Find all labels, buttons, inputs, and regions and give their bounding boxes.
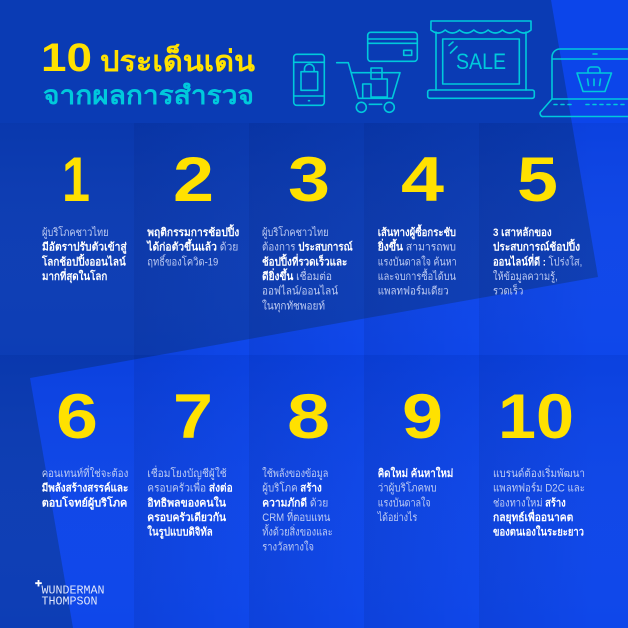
panel 4: แรงบันดาลใจ ค้นหา (378, 255, 457, 268)
panel 1: โลกช้อปปิ้งออนไลน์ (41, 253, 126, 268)
panel 7: 7 (173, 382, 213, 452)
panel 10: 10 (498, 382, 574, 452)
panel 6: มีพลังสร้างสรรค์และ (42, 482, 128, 495)
logo: Wunderman Thompson: THOMPSON (42, 595, 98, 608)
panel 10 (493, 382, 585, 539)
panel 1: มากที่สุดในโลก (42, 268, 108, 284)
panel 4: เส้นทางผู้ซื้อกระชับ (378, 224, 456, 240)
panel 10: ช่องทางใหม่ สร้าง (493, 496, 566, 509)
title: จากผลการสำรวจ (43, 80, 254, 110)
icon: storefront with SALE sign: SALE (456, 49, 506, 74)
panel 9: แรงบันดาลใจ (378, 496, 431, 509)
panel 3: ช้อปปิ้งที่รวดเร็วและ (262, 253, 347, 268)
panel 8 (262, 382, 333, 553)
panel 3: ดียิ่งขึ้น เชื่อมต่อ (262, 268, 332, 283)
logo: Wunderman Thompson: WUNDERMAN (42, 584, 104, 598)
panel 5: รวดเร็ว (493, 284, 523, 298)
panel 7: อิทธิพลของคนใน (147, 495, 226, 509)
panel 5: ออนไลน์ที่ดี : โปร่งใส, (493, 253, 582, 268)
panel 7: ในรูปแบบดิจิทัล (147, 525, 213, 540)
panel 8: ผู้บริโภค สร้าง (262, 481, 322, 495)
panel 10: กลยุทธ์เพื่ออนาคต (493, 509, 573, 525)
panel 2 (145, 145, 239, 268)
logo: Wunderman Thompson (35, 580, 105, 608)
panel 8: รางวัลทางใจ (262, 540, 314, 553)
panel 9: คิดใหม่ ค้นหาใหม่ (378, 466, 453, 480)
icon: shopping cart (337, 63, 400, 112)
panel 8: 8 (287, 382, 330, 452)
panel 7 (147, 382, 233, 540)
panel 4: ยิ่งขึ้น สามารถพบ (377, 239, 456, 254)
panel 4: แพลทฟอร์มเดียว (378, 285, 449, 298)
panel 8: ใช้พลังของข้อมูล (262, 467, 328, 480)
panel 5: 3 เสาหลักของ (493, 226, 552, 239)
title (41, 36, 255, 110)
panel 4: 4 (401, 145, 444, 215)
panel 9 (377, 382, 453, 524)
panel 3: ต้องการ ประสบการณ์ (262, 241, 353, 254)
panel 7: ครอบครัวเดียวกัน (147, 511, 226, 524)
panel 6: 6 (56, 382, 98, 452)
panel 9: ว่าผู้บริโภคพบ (378, 481, 437, 495)
panel 3 (262, 145, 353, 312)
panel 3: 3 (288, 145, 330, 215)
panel 2: ได้ก่อตัวขึ้นแล้ว ด้วย (145, 239, 238, 254)
panel 4: และจบการซื้อได้บน (378, 268, 456, 283)
icon: storefront with SALE sign (428, 21, 534, 98)
panel 7: เชื่อมโยงบัญชีผู้ใช้ (147, 465, 227, 480)
panel 5 (493, 145, 582, 298)
panel 5: ประสบการณ์ช้อปปิ้ง (493, 239, 580, 254)
panel 7: ครอบครัวเพื่อ ส่งต่อ (147, 480, 233, 495)
panel 6 (42, 382, 128, 510)
panel 3: ผู้บริโภคชาวไทย (262, 225, 328, 239)
panel 10: ของตนเองในระยะยาว (493, 525, 584, 539)
panel 1: 1 (62, 145, 90, 215)
panel 6: คอนเทนท์ที่ใช่จะต้อง (42, 465, 128, 480)
panel 9: 9 (402, 382, 443, 452)
panel 5: ให้ข้อมูลความรู้, (493, 270, 558, 283)
icon: credit card (368, 32, 417, 61)
panel 5: 5 (517, 145, 558, 215)
panel 2: ฤทธิ์ของโควิด-19 (147, 253, 218, 268)
icon: laptop with basket (540, 49, 628, 117)
panel 10: แบรนด์ต้องเริ่มพัฒนา (493, 465, 585, 480)
panel 9: ได้อย่างไร (377, 511, 417, 524)
panel 8: CRM ที่ตอบแทน (262, 509, 331, 524)
panel 1: มีอัตราปรับตัวเข้าสู่ (42, 241, 127, 255)
panel 4 (377, 145, 457, 298)
title: 10 (41, 36, 92, 80)
panel 8: ทั้งด้วยสิ่งของและ (262, 524, 333, 539)
panel 6: ตอบโจทย์ผู้บริโภค (42, 495, 127, 510)
panel 1: ผู้บริโภคชาวไทย (42, 225, 108, 239)
panel 8: ความภักดี ด้วย (262, 496, 328, 509)
panel 10: แพลทฟอร์ม D2C และ (493, 482, 585, 495)
panel 1 (41, 145, 127, 284)
panel 2: พฤติกรรมการช้อปปิ้ง (147, 224, 239, 239)
panel 2: 2 (173, 145, 214, 215)
title: ประเด็นเด่น (100, 43, 255, 78)
panel 3: ออฟไลน์/ออนไลน์ (262, 285, 338, 298)
icon: phone with shopping bag (294, 54, 324, 105)
panel 3: ในทุกทัชพอยท์ (262, 299, 325, 312)
